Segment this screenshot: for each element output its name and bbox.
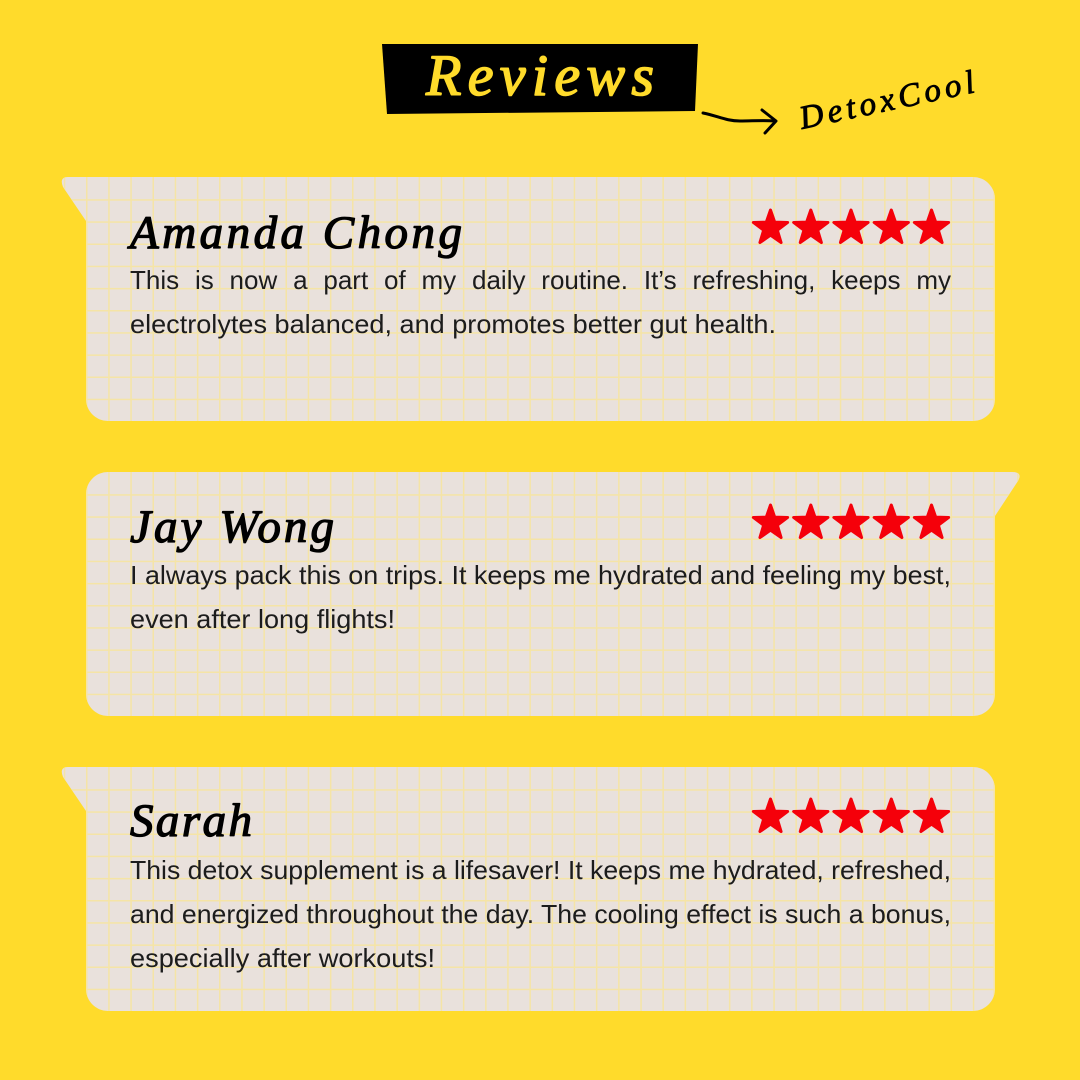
review text: electrolytes balanced, and promotes better gut health. — [130, 309, 776, 339]
speech bubble — [60, 472, 1025, 717]
title banner: Reviews — [425, 43, 654, 108]
review text: especially after workouts! — [130, 943, 435, 973]
review text: This is now a part of my daily routine. It’s refreshing, keeps my — [130, 265, 951, 295]
speech bubble — [60, 767, 1025, 1012]
reviewer name: Jay Wong — [130, 501, 334, 553]
star rating — [753, 210, 949, 243]
star rating — [753, 505, 949, 538]
speech bubble — [60, 177, 1025, 422]
review text — [130, 265, 951, 339]
review text — [130, 560, 951, 634]
brand name: DetoxCool — [795, 65, 978, 137]
star rating — [753, 799, 949, 832]
arrow to brand — [703, 110, 776, 133]
panel: review by Amanda Chong — [60, 177, 1025, 422]
review text: even after long flights! — [130, 604, 395, 634]
panel: review by Sarah — [60, 767, 1025, 1012]
title banner — [382, 43, 698, 114]
review text: and energized throughout the day. The cooling effect is such a bonus, — [130, 899, 951, 929]
reviewer name: Amanda Chong — [127, 207, 462, 259]
panel: review by Jay Wong — [60, 472, 1025, 717]
reviewer name: Sarah — [130, 795, 252, 847]
review text: This detox supplement is a lifesaver! It keeps me hydrated, refreshed, — [130, 855, 951, 885]
review text — [130, 855, 951, 973]
review text: I always pack this on trips. It keeps me hydrated and feeling my best, — [130, 560, 951, 590]
